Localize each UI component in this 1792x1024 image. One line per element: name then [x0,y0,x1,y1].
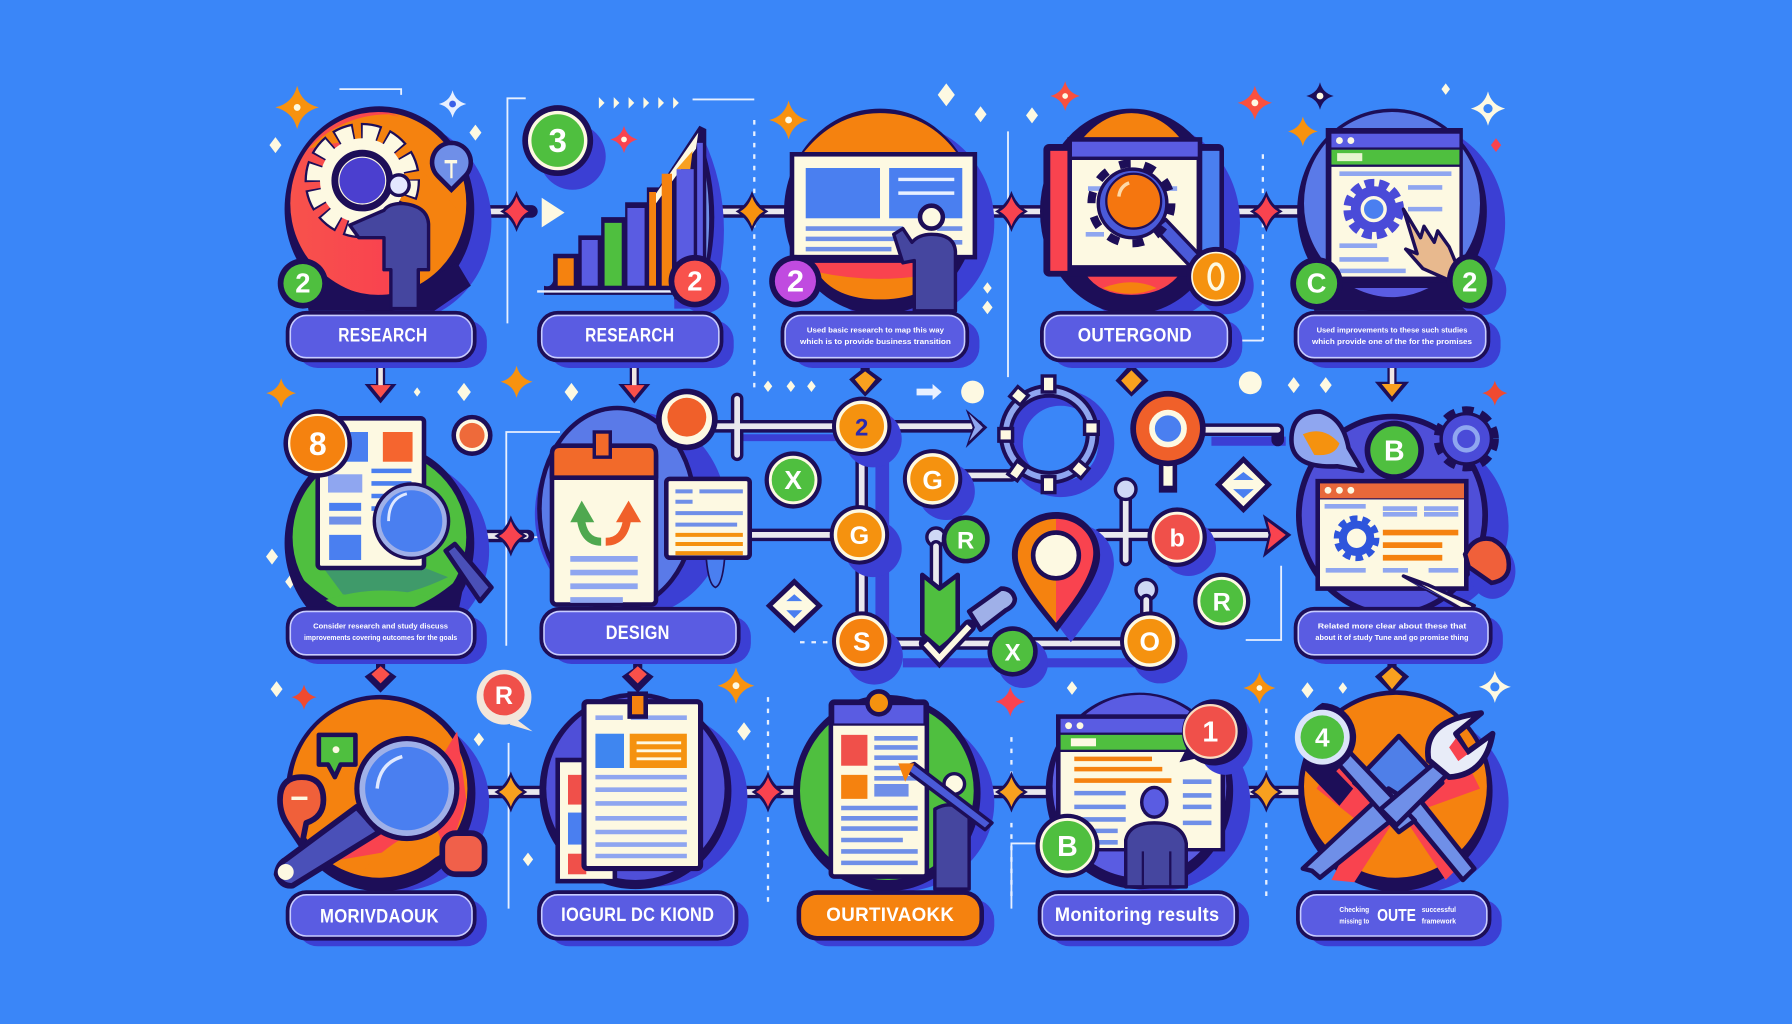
panel 6: document and magnifier [283,409,493,647]
speech badge: R [477,670,533,731]
pill: description 3: which is to provide business transition [799,337,951,346]
panel 11: magnifier and bubbles [277,695,489,891]
panel 12: documents [539,693,747,889]
browser window [1315,479,1469,591]
badge: 8: 8 [309,426,327,462]
book [1043,137,1224,277]
panel 3: article and presenter [769,109,994,323]
pill: description 15: missing to [1339,916,1369,925]
calendar doc [552,432,656,605]
connector arrows between rows [365,361,1409,694]
pill: description 15: successful [1422,905,1456,914]
pill: description 10 [1294,607,1503,664]
thin guide lines [339,89,1281,909]
badge: 3 [522,105,606,190]
article card [792,154,975,257]
icon: gear settings [1349,184,1399,234]
badge: 2 purple [769,255,822,307]
node: O orange lower [1120,579,1187,683]
document [318,418,424,568]
connectors row 3 [472,771,1299,813]
browser window [1326,128,1463,282]
icon: magnifier [1091,163,1209,274]
icon: red block [442,833,485,874]
node: R green: R [957,528,974,555]
icon: person viewer [1126,787,1186,887]
icon: person [350,175,429,309]
icon: magnifier large [277,736,459,886]
connectors row 1 [472,191,1299,232]
icon: chain ring [999,376,1106,493]
node: R green right: R [1213,588,1231,616]
panel 15: crossed tools [1295,690,1509,894]
node: 2: 2 [855,414,868,441]
badge: 4: 4 [1315,722,1330,752]
pill: iogurl dc kiond [537,890,749,946]
pill: iogurl dc kiond: IOGURL DC KIOND [561,904,714,926]
node: red-orange circle [656,389,718,450]
node: G orange [903,449,975,520]
badge: 2 red [669,255,729,313]
decorative sparkles [266,81,1511,866]
node: R green [927,515,990,594]
node: O orange lower: O [1139,626,1160,656]
badge: 4 [1295,703,1356,778]
node: b red [1147,507,1216,576]
icon: person with pencil [898,763,992,889]
badge: 2 red: 2 [687,265,702,296]
speech badge: R: R [495,682,513,710]
document [831,691,927,877]
badge: 2 green: 2 [1462,266,1477,297]
pill: description 3: Used basic research to map this way [807,326,945,335]
badge: 0 [1186,247,1254,314]
connector row 2 left [472,515,528,557]
icon: green bubble [319,735,355,777]
pill: description 3 [781,311,979,368]
pill: description 5 [1294,311,1501,368]
pill: research 2: RESEARCH [585,325,674,347]
panel 1: research gear and person [278,106,491,322]
panel 4: magnifier over book [1040,109,1254,323]
node: X green [765,451,822,509]
icon: location pin [1012,512,1114,642]
badge: B: B [1384,436,1405,468]
panel 5: browser with hand [1290,109,1506,323]
badge: 8 [283,409,352,478]
badge: B [1365,421,1424,480]
icon: red bubble [280,777,323,846]
chart bars [537,126,706,295]
small document [666,479,750,587]
badge: 2 [278,258,328,309]
badge: 1 [1179,699,1253,775]
pill: description 6: Consider research and study discuss [313,622,448,631]
icon: red bubble [1465,539,1515,599]
icon: pin bubble [1291,411,1362,471]
pill: description 6: improvements covering outcomes for the goals [304,633,457,642]
badge: 2: 2 [295,268,310,299]
icon: crossed bars [1303,749,1474,880]
node: S [832,611,903,685]
node: R green right [1193,573,1250,630]
pill: design [539,607,751,664]
pill: description 10: Related more clear about these that [1318,622,1467,631]
node: G: G [850,522,869,550]
pill: research [286,311,487,368]
badge: B green [1035,814,1099,878]
pill: description 15: Checking [1339,905,1369,914]
badge: 3: 3 [548,123,567,160]
panel 13: document with pencil person [793,691,994,891]
icon: blue diamond [1354,736,1442,823]
panel 7: design calendar document [535,389,750,617]
badge: 2 green [1447,254,1506,315]
node: X green: X [784,465,802,495]
pill: description 15 [1296,890,1502,946]
icon: wrench head [1428,713,1493,777]
panel 14: monitoring window [1035,693,1253,891]
pill: ourtivaokk: OURTIVAOKK [826,904,954,926]
badge: C [1290,257,1343,310]
node: O ring orange red [1130,391,1206,493]
front document [584,694,701,869]
pill: research 2 [537,311,734,368]
icon: gear top [1440,413,1493,465]
icon: diamond sign left [766,578,823,633]
pill: morivdaouk: MORIVDAOUK [320,905,439,927]
icon: location bulb [432,143,471,190]
badge: B green: B [1057,831,1078,863]
back document [558,760,615,881]
pill: research: RESEARCH [338,325,427,347]
pill: monitoring results: Monitoring results [1055,904,1219,926]
small orange dot [451,415,493,456]
badge: 1: 1 [1202,717,1218,749]
node: G orange: G [922,465,943,495]
icon: diamond sign right [1215,456,1272,513]
node: X green lower: X [1005,640,1021,667]
icon: person presenter [894,206,955,311]
pill: monitoring results [1038,890,1249,946]
node: X green lower [987,626,1048,688]
icon: green arrow and check [922,575,1015,658]
browser window [1056,714,1225,851]
pill: description 15: framework [1422,916,1457,925]
panel 2: bar chart [522,105,729,313]
pill: morivdaouk [286,890,487,946]
pill: ourtivaokk [797,890,994,946]
pill: outergond: OUTERGOND [1078,325,1192,347]
network: pipes and arrows [714,399,1291,667]
pin: small joint [1115,479,1136,499]
icon: pointing hand [1403,209,1461,281]
badge: 2 purple: 2 [787,263,804,298]
icon: magnifier [373,482,491,601]
pill: design: DESIGN [606,622,670,644]
node: S: S [853,626,870,656]
node: b red: b [1169,524,1185,552]
pill: description 5: Used improvements to these such studies [1317,326,1467,335]
pill: description 5: which provide one of the for the promises [1311,337,1472,346]
pill: outergond [1040,311,1242,368]
panel 10: browser with pencil [1291,411,1515,619]
icon: gear [314,133,410,229]
node: 2 [832,397,902,467]
node: G [830,505,902,577]
pill: description 15: OUTE [1377,905,1416,925]
icon: pencil [1403,576,1474,613]
badge: C: C [1307,268,1327,299]
pill: description 10: about it of study Tune and go promise thing [1315,633,1469,642]
pill: description 6 [286,607,487,664]
